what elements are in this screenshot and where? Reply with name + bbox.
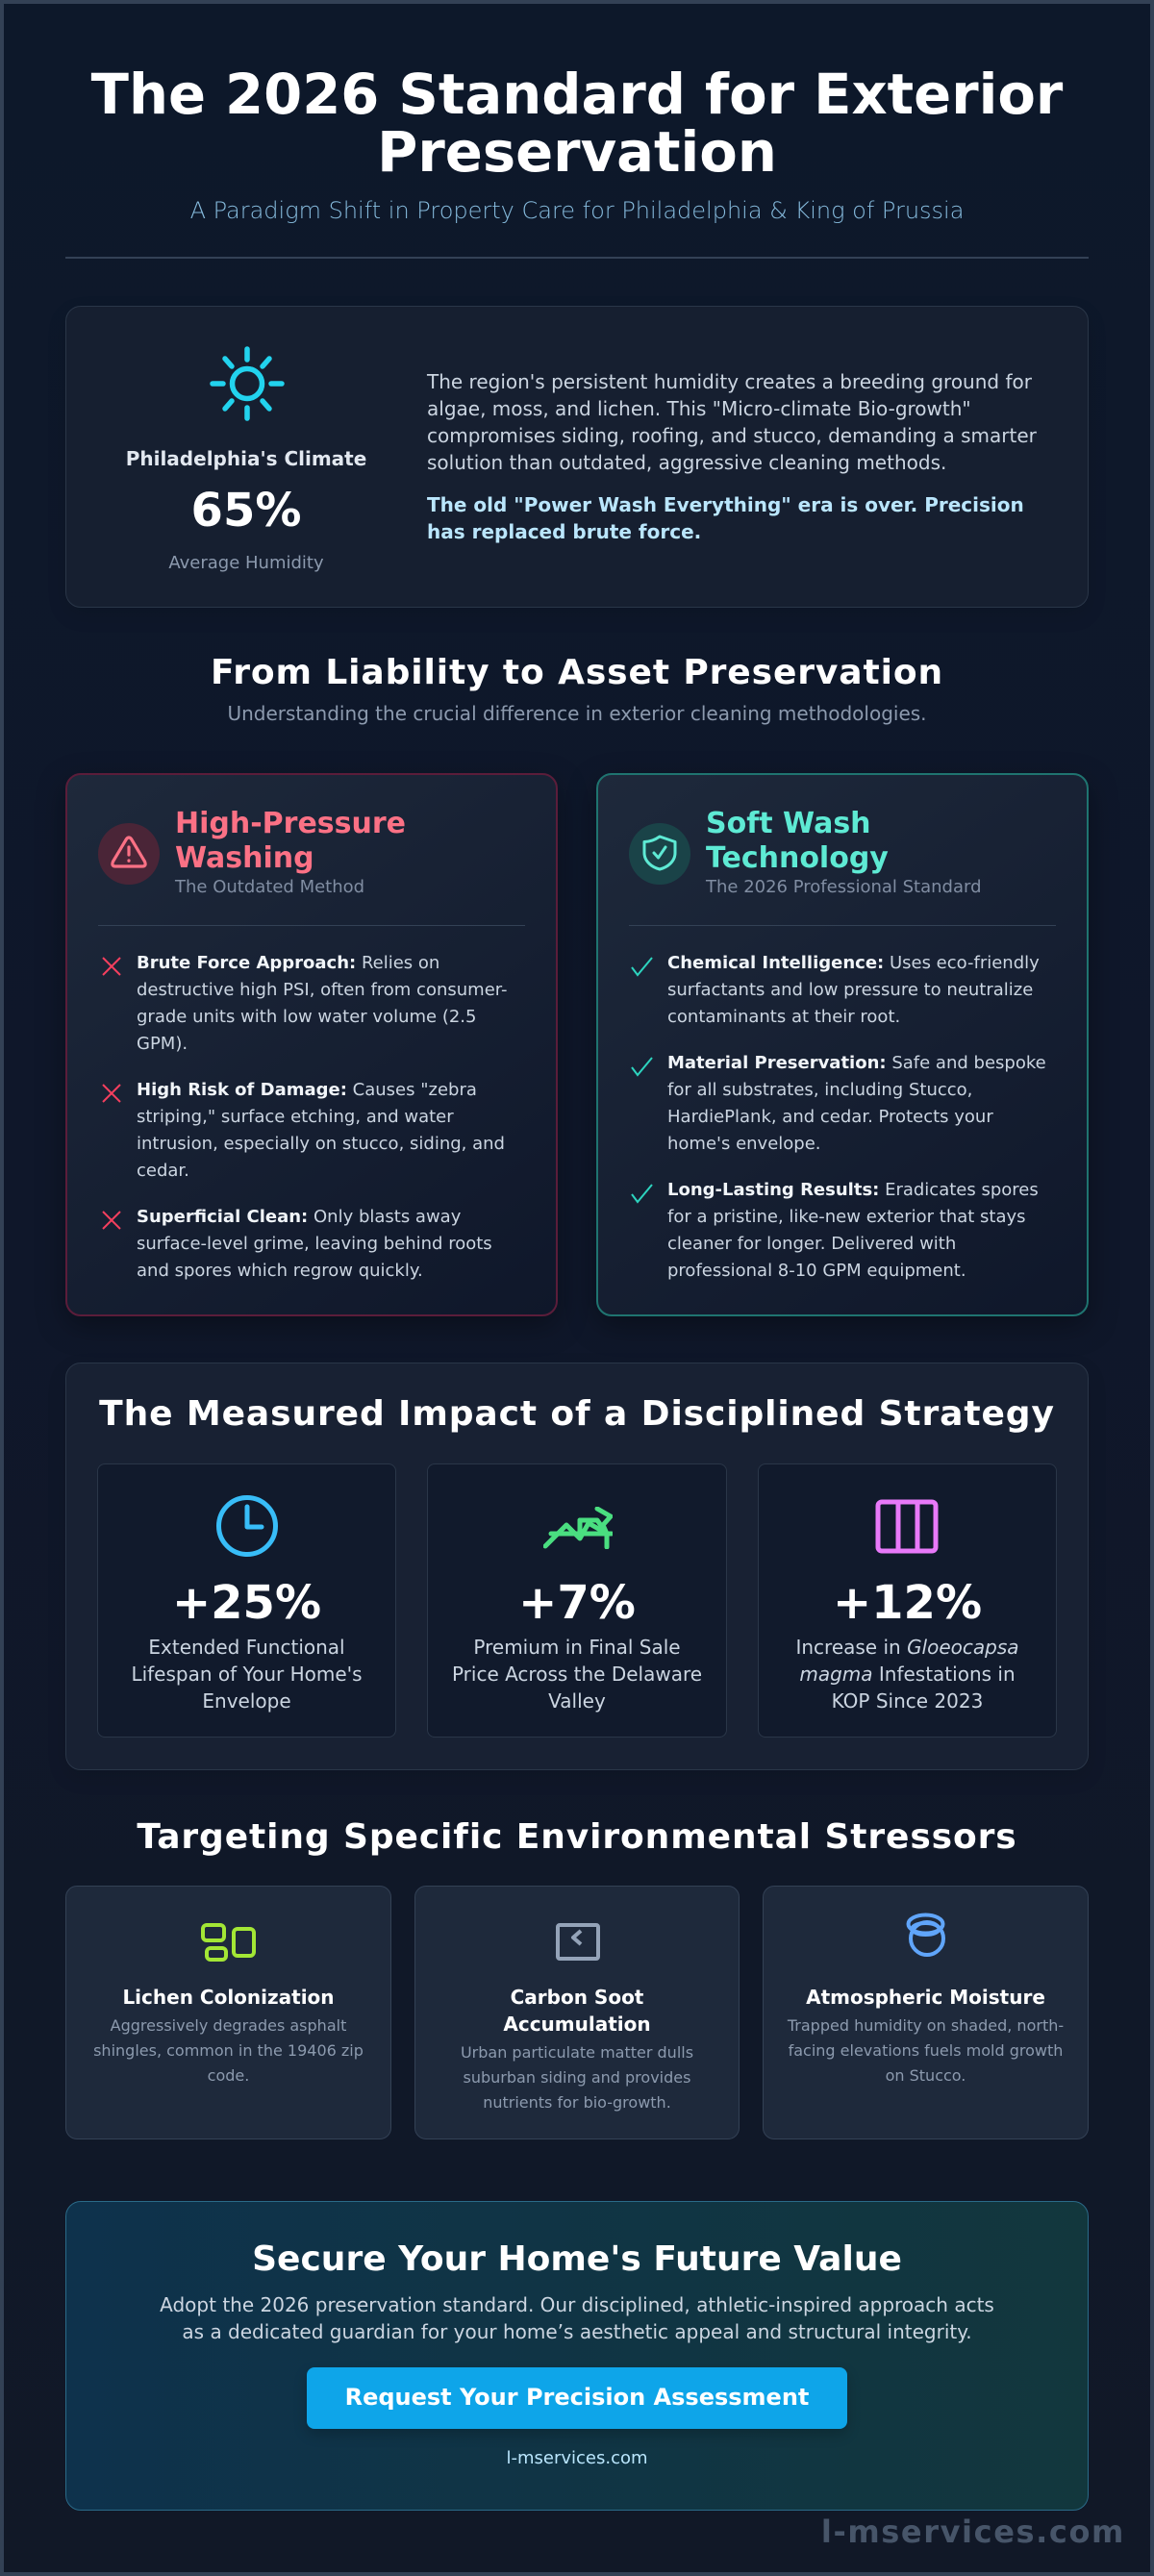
heading: soft wash: Soft Wash Technology xyxy=(706,807,889,875)
icon: warning xyxy=(98,823,160,885)
item: brute force: Brute Force Approach: Relies on destructive high PSI, often from consumer-grade units with low water volume (2.5 GPM). xyxy=(137,953,508,1054)
icon: sun xyxy=(210,346,285,421)
icon: soot frame xyxy=(556,1923,600,1961)
card title: Lichen Colonization xyxy=(122,1986,335,2009)
caption: outdated: The Outdated Method xyxy=(175,877,364,897)
stat value: +12% xyxy=(833,1576,982,1630)
intro text xyxy=(427,370,1037,474)
intro text: The region's persistent humidity creates a breeding ground for xyxy=(427,370,1032,393)
panel: climate intro xyxy=(65,306,1089,608)
item: results: Long-Lasting Results: Eradicates spores for a pristine, like-new exterior that stays cleaner for longer. Delivered with professional 8-10 GPM equipment. xyxy=(667,1180,1039,1281)
cta text xyxy=(160,2293,994,2343)
icon: columns xyxy=(875,1500,939,1554)
cta text: Adopt the 2026 preservation standard. Our disciplined, athletic-inspired approach acts xyxy=(160,2293,994,2316)
item: superficial: Superficial Clean: Only blasts away surface-level grime, leaving behind roots and spores which regrow quickly. xyxy=(137,1207,492,1281)
stat value: +7% xyxy=(518,1576,636,1630)
panel: measured impact xyxy=(65,1363,1089,1770)
icon: check xyxy=(631,1057,653,1077)
intro text: algae, moss, and lichen. This "Micro-climate Bio-growth" xyxy=(427,397,971,420)
climate stat caption: Average Humidity xyxy=(168,553,324,573)
card: soot xyxy=(414,1886,740,2139)
card: lichen xyxy=(65,1886,391,2139)
card text: Trapped humidity on shaded, north-facing elevations fuels mold growth on Stucco. xyxy=(788,2016,1064,2085)
card text: Urban particulate matter dulls suburban siding and provides nutrients for bio-growth. xyxy=(461,2043,693,2112)
stat caption: Extended Functional Lifespan of Your Home's Envelope xyxy=(131,1636,363,1713)
intro text: solution than outdated, aggressive cleaning methods. xyxy=(427,451,946,474)
title: The 2026 Standard for Exterior Preservation xyxy=(91,63,1063,185)
button: Request Your Precision Assessment xyxy=(345,2384,809,2411)
subtitle: A Paradigm Shift in Property Care for Philadelphia & King of Prussia xyxy=(190,197,964,224)
intro emphasis: has replaced brute force. xyxy=(427,520,701,543)
card: moisture xyxy=(763,1886,1089,2139)
item: material: Material Preservation: Safe and bespoke for all substrates, including Stucco, HardiePlank, and cedar. Protects your home's envelope. xyxy=(667,1053,1046,1154)
stat caption: Increase in Gloeocapsa magma Infestations in KOP Since 2023 xyxy=(795,1636,1019,1713)
icon: clock xyxy=(216,1495,278,1557)
intro emphasis xyxy=(427,493,1024,543)
icon: lichen blocks xyxy=(201,1923,256,1962)
icon: x xyxy=(102,1211,121,1230)
icon: check xyxy=(631,1184,653,1204)
heading: high-pressure: High-Pressure Washing xyxy=(175,807,406,875)
stat: premium xyxy=(427,1463,727,1738)
card title: Atmospheric Moisture xyxy=(806,1986,1045,2009)
heading: environmental stressors: Targeting Specific Environmental Stressors xyxy=(137,1817,1017,1857)
heading: liability to asset: From Liability to Asset Preservation xyxy=(211,653,943,692)
icon: check xyxy=(631,957,653,977)
icon: moisture rings xyxy=(906,1913,945,1957)
panel: soft wash technology xyxy=(596,773,1089,1316)
stat: infestations xyxy=(758,1463,1057,1738)
stat value: +25% xyxy=(172,1576,321,1630)
website: l-mservices.com xyxy=(506,2448,648,2468)
card title: Carbon Soot Accumulation xyxy=(503,1986,651,2036)
panel: call to action xyxy=(65,2201,1089,2511)
caption: professional: The 2026 Professional Standard xyxy=(706,877,982,897)
watermark: l-mservices.com xyxy=(821,2513,1125,2550)
panel: high-pressure washing xyxy=(65,773,558,1316)
item: chemical: Chemical Intelligence: Uses eco-friendly surfactants and low pressure to neutralize contaminants at their root. xyxy=(667,953,1040,1027)
icon: chart scribble xyxy=(543,1507,613,1549)
climate stat label: Philadelphia's Climate xyxy=(126,447,366,470)
icon: x xyxy=(102,1084,121,1103)
icon: x xyxy=(102,957,121,976)
stat: lifespan xyxy=(97,1463,396,1738)
stat caption: Premium in Final Sale Price Across the Delaware Valley xyxy=(452,1636,702,1713)
intro text: compromises siding, roofing, and stucco, demanding a smarter xyxy=(427,424,1037,447)
cta text: as a dedicated guardian for your home’s aesthetic appeal and structural integrity. xyxy=(182,2320,972,2343)
intro emphasis: The old "Power Wash Everything" era is over. Precision xyxy=(427,493,1024,516)
heading: measured impact: The Measured Impact of a Disciplined Strategy xyxy=(99,1394,1055,1434)
subheading: liability to asset: Understanding the crucial difference in exterior cleaning methodologies. xyxy=(227,702,927,725)
icon: shield xyxy=(629,823,690,885)
item: risk: High Risk of Damage: Causes "zebra striping," surface etching, and water intrusion, especially on stucco, siding, and cedar. xyxy=(137,1080,505,1181)
cta heading: Secure Your Home's Future Value xyxy=(252,2239,902,2279)
card text: Aggressively degrades asphalt shingles, common in the 19406 zip code. xyxy=(93,2016,364,2085)
button xyxy=(307,2367,847,2429)
climate stat value: 65% xyxy=(191,484,301,538)
